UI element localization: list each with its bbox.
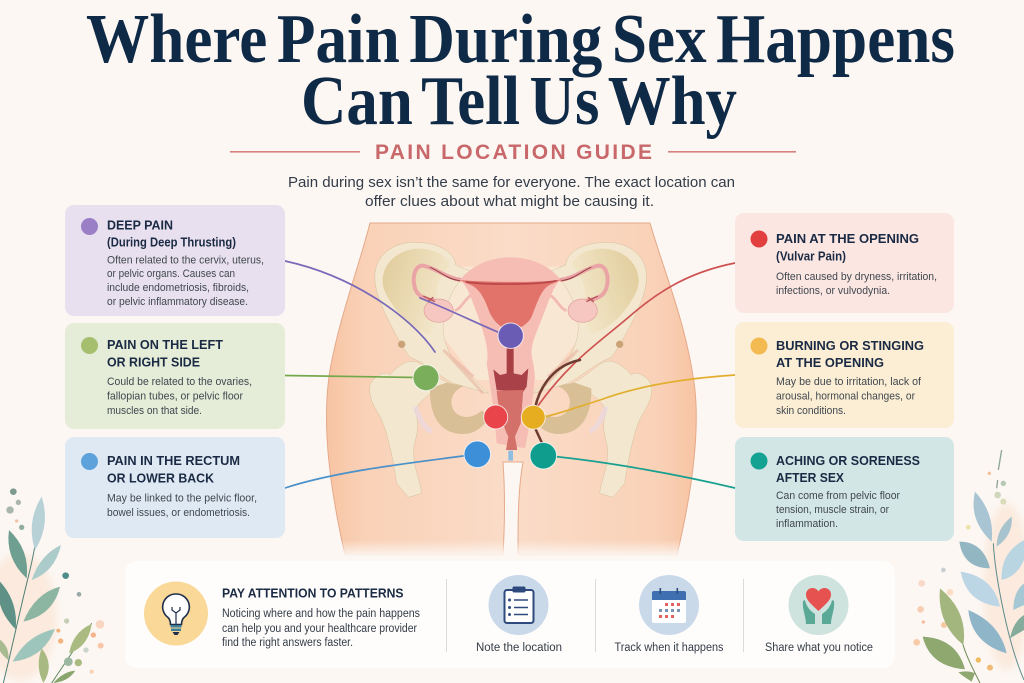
reproductive organs [414, 257, 608, 461]
subtitle with rules: PAIN LOCATION GUIDE [375, 141, 652, 164]
panel: aching or soreness: Can come from pelvic floor [776, 490, 900, 502]
marker: aching [530, 442, 557, 469]
pattern text: PAY ATTENTION TO PATTERNS [222, 586, 404, 600]
body silhouette [326, 223, 696, 555]
pelvic bones [370, 242, 652, 497]
connector lines [285, 261, 735, 488]
panel: rectum or lower back: bowel issues, or endometriosis. [107, 507, 250, 519]
title: Can Tell Us Why [301, 63, 737, 140]
connector: brown accent [535, 360, 580, 443]
foliage: bottom right [913, 450, 1024, 683]
label: note the location: Note the location [476, 642, 562, 654]
label: track when it happens: Track when it happens [614, 642, 724, 654]
panel: aching or soreness [735, 437, 954, 541]
connector: burning [540, 375, 735, 418]
panel: aching or soreness: AFTER SEX [776, 470, 844, 485]
panel: rectum or lower back: PAIN IN THE RECTUM [107, 453, 240, 468]
marker: deep pain [498, 323, 523, 348]
intro text: Pain during sex isn’t the same for everyone. The exact location can [288, 174, 735, 191]
panel: pain at the opening: infections, or vulvodynia. [776, 285, 890, 297]
panel: rectum or lower back: OR LOWER BACK [107, 470, 215, 486]
panel: left or right side: muscles on that side. [107, 405, 202, 417]
title: Where Pain During Sex Happens [86, 1, 955, 78]
pattern text: find the right answers faster. [222, 637, 353, 649]
panel: aching or soreness: ACHING OR SORENESS [776, 453, 920, 468]
marker: burning [521, 405, 545, 429]
panel: deep pain: Often related to the cervix, uterus, [107, 254, 264, 266]
label: share what you notice: Share what you notice [765, 642, 873, 654]
panel: rectum or lower back: May be linked to the pelvic floor, [107, 492, 257, 504]
icon: clipboard [488, 575, 548, 635]
connector: left or right side [285, 376, 418, 378]
connector: opening [535, 263, 735, 410]
pattern text: can help you and your healthcare provider [222, 623, 417, 635]
panel: rectum or lower back [65, 437, 285, 538]
panel: burning or stinging [735, 322, 954, 428]
panel: aching or soreness: inflammation. [776, 518, 838, 530]
panel: left or right side [65, 323, 285, 429]
intro text [288, 174, 735, 210]
panel: burning or stinging: May be due to irritation, lack of [776, 376, 922, 388]
marker: opening [484, 405, 508, 429]
panel: pain at the opening: (Vulvar Pain) [776, 248, 846, 264]
panel: aching or soreness: tension, muscle strain, or [776, 504, 889, 516]
pattern text [222, 586, 420, 649]
intro text: offer clues about what might be causing it. [365, 193, 654, 210]
marker: rectum [464, 441, 491, 468]
marker: side pain [413, 365, 439, 391]
panel: pay attention to patterns [125, 561, 895, 668]
panel: left or right side: fallopian tubes, or pelvic floor [107, 390, 243, 402]
panel: left or right side: PAIN ON THE LEFT [107, 337, 223, 352]
panel: deep pain: or pelvic inflammatory disease. [107, 296, 248, 308]
panel: pain at the opening: Often caused by dryness, irritation, [776, 271, 937, 283]
panel: left or right side: Could be related to the ovaries, [107, 376, 252, 388]
panel: burning or stinging: arousal, hormonal changes, or [776, 390, 915, 402]
icon: light bulb [144, 582, 208, 646]
connector: deep pain [285, 261, 505, 352]
connector: rectum [285, 455, 470, 488]
icon: calendar [639, 575, 699, 635]
pain markers [413, 323, 557, 469]
panel: burning or stinging: BURNING OR STINGING [776, 338, 924, 353]
panel: left or right side: OR RIGHT SIDE [107, 354, 200, 370]
icon: heart in hands [788, 575, 848, 635]
panel: pain at the opening [735, 213, 954, 313]
connector: aching [550, 456, 735, 488]
title [86, 1, 955, 140]
foliage: bottom left [0, 488, 104, 683]
panel: deep pain: include endometriosis, fibroids, [107, 282, 249, 294]
panel: burning or stinging: skin conditions. [776, 405, 846, 417]
panel: deep pain [65, 205, 285, 316]
panel: pain at the opening: PAIN AT THE OPENING [776, 231, 919, 246]
panel: burning or stinging: AT THE OPENING [776, 355, 884, 370]
panel: deep pain: (During Deep Thrusting) [107, 234, 236, 250]
panel: deep pain: DEEP PAIN [107, 218, 173, 232]
pattern text: Noticing where and how the pain happens [222, 608, 420, 620]
panel: deep pain: or pelvic organs. Causes can [107, 268, 235, 280]
anatomical illustration [326, 223, 696, 555]
fade at bottom of figure [320, 540, 705, 557]
